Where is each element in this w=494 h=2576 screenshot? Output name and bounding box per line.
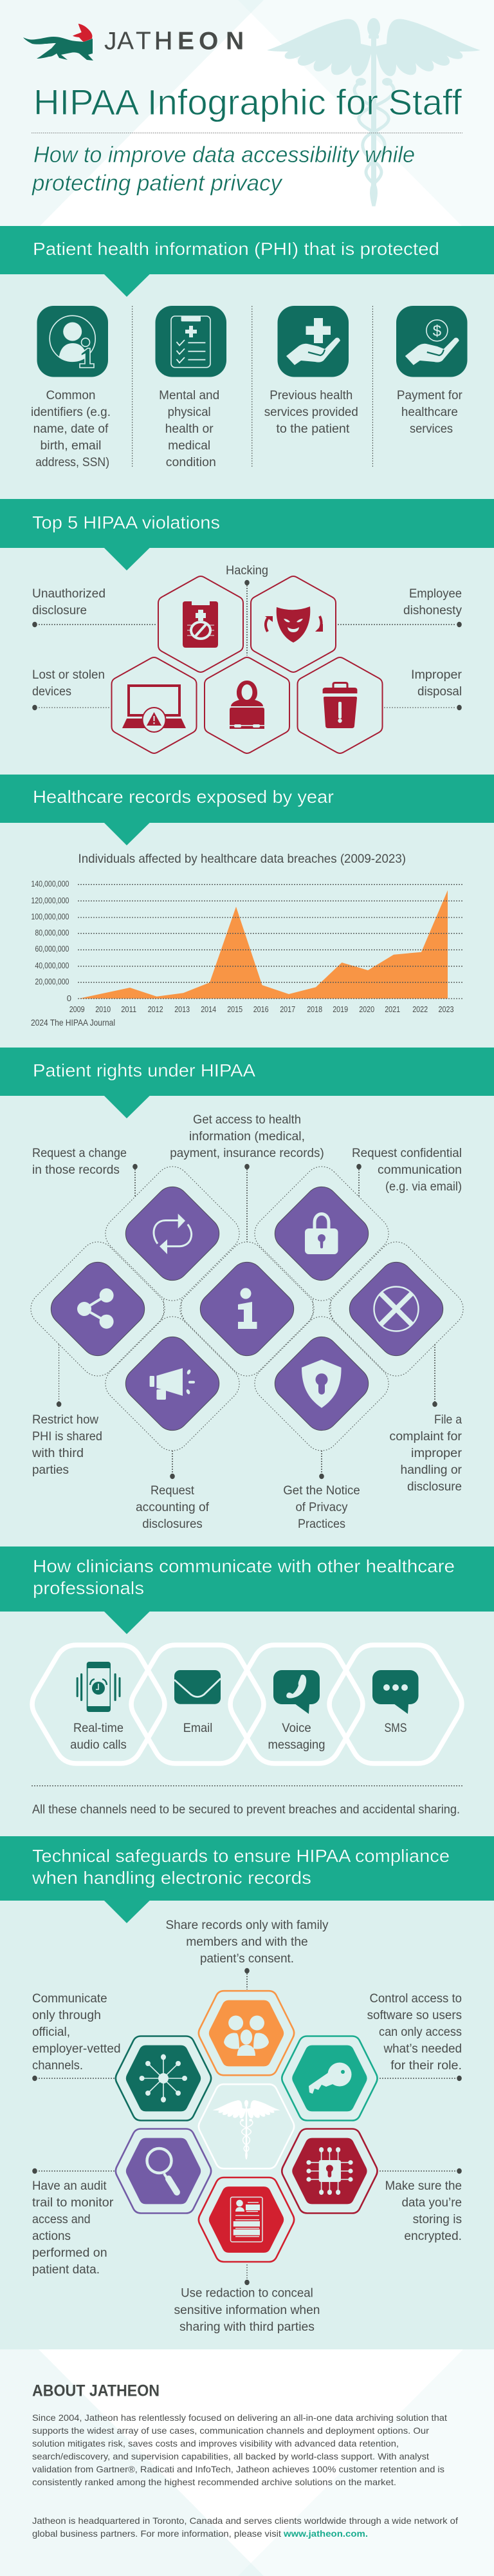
panel: patient health information — [0, 226, 494, 469]
label: file a complaint: handling or — [400, 1463, 462, 1477]
heading banner — [0, 1547, 494, 1634]
icon: megaphone diamond — [119, 1330, 226, 1437]
label: unauthorized disclosure: Unauthorized — [32, 587, 105, 601]
icon: shield diamond — [268, 1330, 375, 1437]
text: channels note: All these channels need to be secured to prevent breaches and accidental sharing. — [32, 1803, 460, 1817]
label: improper disposal — [384, 668, 462, 710]
text: payment for healthcare: services — [410, 422, 453, 436]
x axis labels: 2011 — [121, 1004, 136, 1014]
icon: refresh diamond — [119, 1180, 226, 1287]
panel: page header — [0, 0, 494, 226]
text: company description: consistently ranked among the highest recommended archive solutions on the market. — [32, 2477, 396, 2487]
label: restrict how PHI is shared: PHI is shared — [32, 1430, 102, 1443]
label: restrict how PHI is shared: with third — [32, 1447, 84, 1460]
label: communicate through official channels: official, — [32, 2026, 70, 2039]
hexagon: access key — [282, 2036, 378, 2121]
label: notice of privacy practices — [283, 1451, 360, 1531]
x axis labels: 2023 — [439, 1004, 454, 1014]
y axis labels: 60,000,000 — [35, 944, 69, 954]
text: headquarters and website: global business partners. For more information, please visit — [32, 2528, 281, 2539]
logo: Jatheon: J — [104, 28, 117, 55]
heading banner — [0, 499, 494, 570]
text: headquarters and website: www.jatheon.com. — [283, 2528, 368, 2539]
title: HIPAA Infographic for Staff — [33, 82, 462, 122]
heading banner: when handling electronic records — [32, 1868, 311, 1888]
label: request a change — [32, 1147, 138, 1196]
chart source: 2024 The HIPAA Journal — [31, 1017, 115, 1028]
x axis labels: 2013 — [174, 1004, 190, 1014]
icon: hand with medical cross — [278, 306, 349, 377]
logo: Jatheon — [23, 24, 244, 61]
label: real-time audio calls: audio calls — [70, 1738, 127, 1752]
hexagon: central caduceus — [199, 2084, 294, 2168]
icon: cross circle diamond — [349, 1262, 444, 1356]
label: notice of privacy practices: Practices — [298, 1518, 345, 1531]
logo: Jatheon: E — [178, 28, 194, 55]
label: lost or stolen devices: Lost or stolen — [32, 668, 105, 682]
x axis labels: 2022 — [412, 1004, 428, 1014]
icon: share diamond — [44, 1255, 151, 1362]
label: SMS: SMS — [385, 1722, 407, 1735]
panel: about Jatheon — [0, 2349, 494, 2576]
label: redaction: sensitive information when — [174, 2304, 320, 2317]
text: previous health services: Previous health — [270, 389, 352, 402]
text: mental and physical: health or — [165, 422, 214, 436]
label: control access: can only access — [379, 2026, 462, 2039]
label: communicate through official channels — [32, 1992, 121, 2081]
icon: email envelope — [174, 1670, 221, 1704]
label: audit trail: performed on — [32, 2246, 107, 2260]
label: audit trail: trail to monitor — [32, 2196, 114, 2210]
hexagon: redaction document — [199, 2177, 294, 2262]
icon: caduceus watermark — [267, 18, 480, 207]
icon: clipboard checklist — [156, 306, 226, 377]
label: file a complaint: File a — [434, 1413, 462, 1427]
x axis labels: 2021 — [385, 1004, 400, 1014]
text: previous health services: services provided — [264, 406, 358, 419]
label: employee dishonesty: Employee — [409, 587, 462, 601]
label: improper disposal: disposal — [417, 685, 462, 699]
label: file a complaint: complaint for — [389, 1430, 462, 1443]
x axis labels: 2016 — [253, 1004, 269, 1014]
label: share records: Share records only with family — [166, 1919, 329, 1932]
x axis labels: 2017 — [280, 1004, 295, 1014]
label: audit trail — [32, 2168, 114, 2277]
label: request a change: Request a change — [32, 1147, 127, 1160]
label: control access: for their role. — [390, 2059, 462, 2073]
heading banner: Healthcare records exposed by year — [33, 787, 334, 807]
text: company description: Since 2004, Jatheon has relentlessly focused on delivering an all-in-one data archiving solution that — [32, 2412, 447, 2423]
text: mental and physical: condition — [166, 456, 216, 469]
hexagon: audit trail magnifier — [116, 2129, 211, 2214]
text: common identifiers: birth, email — [40, 439, 101, 453]
x axis labels: 2019 — [333, 1004, 348, 1014]
heading banner: How clinicians communicate with other healthcare — [33, 1556, 455, 1576]
label: unauthorized disclosure: disclosure — [32, 604, 87, 617]
label: request accounting: disclosures — [142, 1518, 203, 1531]
text: common identifiers: identifiers (e.g. — [31, 406, 111, 419]
label: communicate through official channels: employer-vetted — [32, 2042, 121, 2056]
label: voice messaging: Voice — [282, 1722, 311, 1735]
heading banner: Top 5 HIPAA violations — [32, 512, 220, 532]
label: hacking: Hacking — [226, 564, 268, 578]
text: common identifiers: Common — [46, 389, 95, 402]
label: real-time audio calls: Real-time — [73, 1722, 124, 1735]
label: file a complaint — [389, 1344, 462, 1494]
heading banner — [0, 775, 494, 845]
label: employee dishonesty: dishonesty — [403, 604, 462, 617]
label: notice of privacy practices: of Privacy — [296, 1501, 348, 1514]
heading banner — [0, 1048, 494, 1118]
x axis labels: 2009 — [69, 1004, 85, 1014]
x axis labels: 2015 — [227, 1004, 242, 1014]
label: file a complaint: improper — [411, 1447, 462, 1460]
label: encryption: Make sure the — [385, 2179, 462, 2193]
icon: employee mask hexagon — [251, 576, 336, 672]
x axis labels: 2018 — [307, 1004, 322, 1014]
label: confidential communication: (e.g. via email) — [385, 1180, 462, 1194]
y axis labels: 140,000,000 — [31, 879, 69, 888]
label: control access: software so users — [367, 2009, 462, 2022]
label: get access: information (medical, — [189, 1130, 305, 1143]
label: audit trail: Have an audit — [32, 2179, 107, 2193]
label: email: Email — [183, 1722, 212, 1735]
subtitle: protecting patient privacy — [32, 171, 283, 196]
label: communicate through official channels: channels. — [32, 2059, 83, 2073]
label: encryption — [380, 2168, 462, 2243]
heading banner: Technical safeguards to ensure HIPAA compliance — [32, 1846, 450, 1866]
hexagon: network channels — [116, 2036, 211, 2121]
label: notice of privacy practices: Get the Notice — [283, 1484, 360, 1498]
icon: laptop warning hexagon — [112, 657, 197, 753]
text: company description: supports the widest array of use cases, communication channels and deployment options. Our — [32, 2425, 429, 2436]
label: restrict how PHI is shared — [32, 1344, 102, 1477]
heading banner — [0, 1836, 494, 1923]
label: confidential communication — [352, 1147, 462, 1196]
heading banner: professionals — [33, 1578, 144, 1598]
label: control access — [367, 1992, 462, 2081]
label: request accounting — [136, 1451, 210, 1531]
label: audit trail: actions — [32, 2230, 71, 2243]
heading banner — [0, 226, 494, 297]
label: communicate through official channels: only through — [32, 2009, 101, 2022]
label: unauthorized disclosure — [32, 587, 156, 627]
label: request accounting: accounting of — [136, 1501, 210, 1514]
panel: patient rights under HIPAA — [0, 1048, 494, 1531]
icon: voice message bubble — [273, 1670, 320, 1714]
text: mental and physical: Mental and — [159, 389, 219, 402]
label: share records: members and with the — [186, 1935, 308, 1949]
logo: Jatheon: T — [136, 28, 151, 55]
y axis labels: 20,000,000 — [35, 977, 69, 986]
logo: Jatheon: O — [199, 28, 218, 55]
icon: identifiers — [37, 306, 108, 377]
heading: about Jatheon: ABOUT JATHEON — [32, 2382, 160, 2400]
logo: Jatheon: N — [226, 28, 244, 55]
text: common identifiers: name, date of — [33, 422, 109, 436]
label: improper disposal: Improper — [411, 668, 462, 682]
label: request a change: in those records — [32, 1163, 120, 1177]
label: communicate through official channels: Communicate — [32, 1992, 107, 2006]
y axis labels: 40,000,000 — [35, 961, 69, 970]
text: payment for healthcare: healthcare — [401, 406, 458, 419]
label: encryption: storing is — [413, 2213, 462, 2226]
label: request accounting: Request — [151, 1484, 195, 1498]
logo: Jatheon: A — [117, 28, 134, 55]
area chart — [31, 879, 462, 1014]
label: restrict how PHI is shared: Restrict how — [32, 1413, 98, 1427]
label: share records: patient’s consent. — [200, 1952, 294, 1966]
text: company description: search/ediscovery, and supervision capabilities, all backed by world-class support. With analyst — [32, 2451, 429, 2461]
label: confidential communication: Request confidential — [352, 1147, 462, 1160]
icon: information diamond — [194, 1255, 300, 1362]
label: share records — [166, 1919, 329, 1989]
text: company description: solution mitigates risk, saves costs and improves visibility with advanced data retention, — [32, 2438, 399, 2449]
panel: technical safeguards — [0, 1836, 494, 2334]
label: file a complaint: disclosure — [407, 1480, 462, 1494]
panel: how clinicians communicate — [0, 1547, 494, 1817]
icon: hacker hexagon — [205, 657, 289, 753]
label: redaction — [174, 2264, 320, 2334]
icon: hand with coin — [396, 306, 467, 377]
chart title: Individuals affected by healthcare data breaches (2009-2023) — [78, 852, 406, 866]
logo: Jatheon: H — [154, 28, 172, 55]
text: mental and physical: medical — [168, 439, 210, 453]
heading banner: Patient rights under HIPAA — [33, 1060, 255, 1080]
x axis labels: 2012 — [148, 1004, 163, 1014]
panel: top 5 HIPAA violations — [0, 499, 494, 753]
text: headquarters and website: Jatheon is headquartered in Toronto, Canada and serves clients worldwide through a wide network of — [32, 2515, 458, 2526]
label: encryption: data you’re — [401, 2196, 462, 2210]
label: redaction: sharing with third parties — [179, 2320, 315, 2334]
x axis labels: 2010 — [95, 1004, 111, 1014]
text: payment for healthcare: Payment for — [397, 389, 463, 402]
label: confidential communication: communication — [378, 1163, 462, 1177]
text: common identifiers: address, SSN) — [35, 456, 109, 469]
y axis labels: 0 — [67, 993, 71, 1003]
icon: unauthorized badge hexagon — [158, 576, 243, 672]
label: hacking — [226, 564, 268, 655]
label: get access: Get access to health — [193, 1113, 301, 1127]
label: control access: Control access to — [369, 1992, 462, 2006]
label: encryption: encrypted. — [404, 2230, 462, 2243]
icon: trash hexagon — [297, 657, 382, 753]
label: employee dishonesty — [338, 587, 462, 627]
label: restrict how PHI is shared: parties — [32, 1463, 69, 1477]
label: voice messaging: messaging — [268, 1738, 325, 1752]
text: previous health services: to the patient — [276, 422, 350, 436]
icon: real-time audio call — [77, 1662, 121, 1712]
label: lost or stolen devices — [32, 668, 110, 710]
panel: healthcare records exposed by year — [0, 775, 494, 1028]
x axis labels: 2014 — [201, 1004, 216, 1014]
x axis labels: 2020 — [359, 1004, 374, 1014]
icon: hand with coin: $ — [433, 323, 441, 340]
y axis labels: 100,000,000 — [31, 912, 69, 921]
label: control access: what’s needed — [383, 2042, 462, 2056]
text: mental and physical: physical — [168, 406, 211, 419]
label: redaction: Use redaction to conceal — [181, 2287, 313, 2300]
y axis labels: 120,000,000 — [31, 896, 69, 905]
hexagon: family members — [199, 1991, 294, 2075]
text: company description: validation from Gartner®, Radicati and InfoTech, Jatheon achieves 100% customer retention and is — [32, 2464, 444, 2474]
label: lost or stolen devices: devices — [32, 685, 71, 699]
y axis labels: 80,000,000 — [35, 928, 69, 937]
icon: SMS bubble — [372, 1670, 418, 1714]
label: audit trail: access and — [32, 2213, 91, 2226]
label: audit trail: patient data. — [32, 2263, 100, 2277]
icon: lock diamond — [268, 1180, 375, 1287]
label: get access — [170, 1113, 324, 1242]
white hexagon outlines — [32, 1645, 462, 1763]
subtitle: How to improve data accessibility while — [33, 142, 415, 167]
hexagon: encrypted chip — [282, 2129, 378, 2214]
heading banner: Patient health information (PHI) that is protected — [33, 239, 439, 259]
label: get access: payment, insurance records) — [170, 1147, 324, 1160]
